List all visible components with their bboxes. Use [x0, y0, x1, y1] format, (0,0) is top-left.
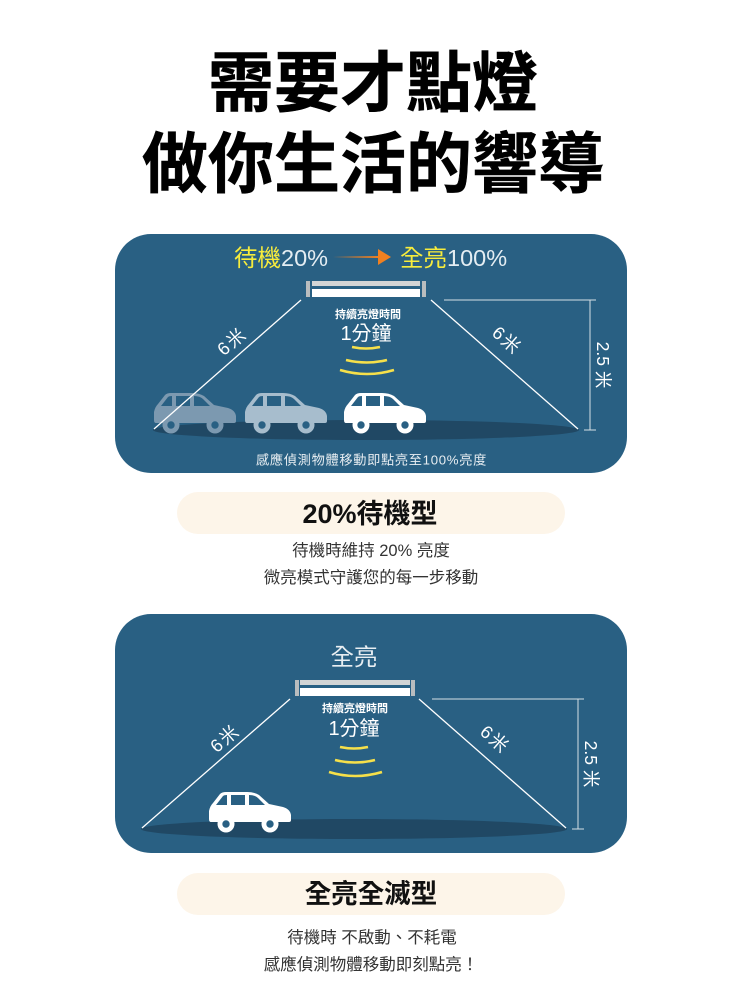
floor shadow [153, 420, 579, 440]
beam lines and dimensions [154, 300, 596, 430]
car: lit [344, 393, 426, 434]
beam lines and dimensions [142, 699, 584, 829]
sensor waves [329, 747, 382, 776]
panel: 20% standby diagram [115, 234, 627, 473]
label: 2.5 meters: 2.5 米 [581, 741, 601, 787]
car: faded far [154, 393, 236, 434]
lamp [306, 281, 426, 297]
sensor waves [340, 347, 394, 374]
lighting duration [322, 701, 388, 740]
lighting duration: 持續亮燈時間 [322, 701, 388, 715]
car: lit [209, 792, 291, 832]
floor shadow [141, 819, 567, 839]
label: 6 meters left: 6米 [206, 720, 244, 757]
lighting duration [335, 307, 401, 345]
car: faded near [245, 393, 327, 434]
title [142, 46, 604, 201]
title: 做你生活的響導 [142, 127, 604, 201]
lighting duration: 持續亮燈時間 [335, 307, 401, 321]
pill heading: 20% standby type: 20%待機型 [302, 499, 438, 529]
heading: standby to full brightness: 全亮100% [400, 245, 507, 271]
label: 6 meters left: 6米 [213, 323, 251, 360]
heading: standby to full brightness [234, 245, 507, 271]
pill heading: 20% standby type [177, 492, 565, 534]
description: full on: 感應偵測物體移動即刻點亮！ [264, 954, 478, 974]
description: full on: 待機時 不啟動、不耗電 [287, 928, 457, 947]
arrow [333, 249, 391, 265]
title: 需要才點燈 [208, 46, 538, 120]
pill heading: full on type [177, 873, 565, 915]
lighting duration: 1分鐘 [340, 322, 392, 345]
description: standby: 微亮模式守護您的每一步移動 [264, 568, 478, 587]
label: 6 meters right: 6米 [476, 721, 514, 758]
lighting duration: 1分鐘 [328, 717, 380, 740]
caption: 感應偵測物體移動即點亮至100%亮度 [256, 452, 487, 468]
pill heading: full on type: 全亮全滅型 [305, 879, 437, 909]
label: 2.5 meters: 2.5 米 [593, 342, 613, 388]
label: 6 meters right: 6米 [488, 322, 526, 359]
description: full on [264, 928, 478, 974]
heading: standby to full brightness: 待機20% [234, 245, 328, 271]
panel: full on diagram [115, 614, 627, 853]
lamp [295, 680, 415, 696]
description: standby [264, 541, 478, 587]
heading: full brightness: 全亮 [330, 644, 378, 670]
description: standby: 待機時維持 20% 亮度 [292, 541, 450, 560]
